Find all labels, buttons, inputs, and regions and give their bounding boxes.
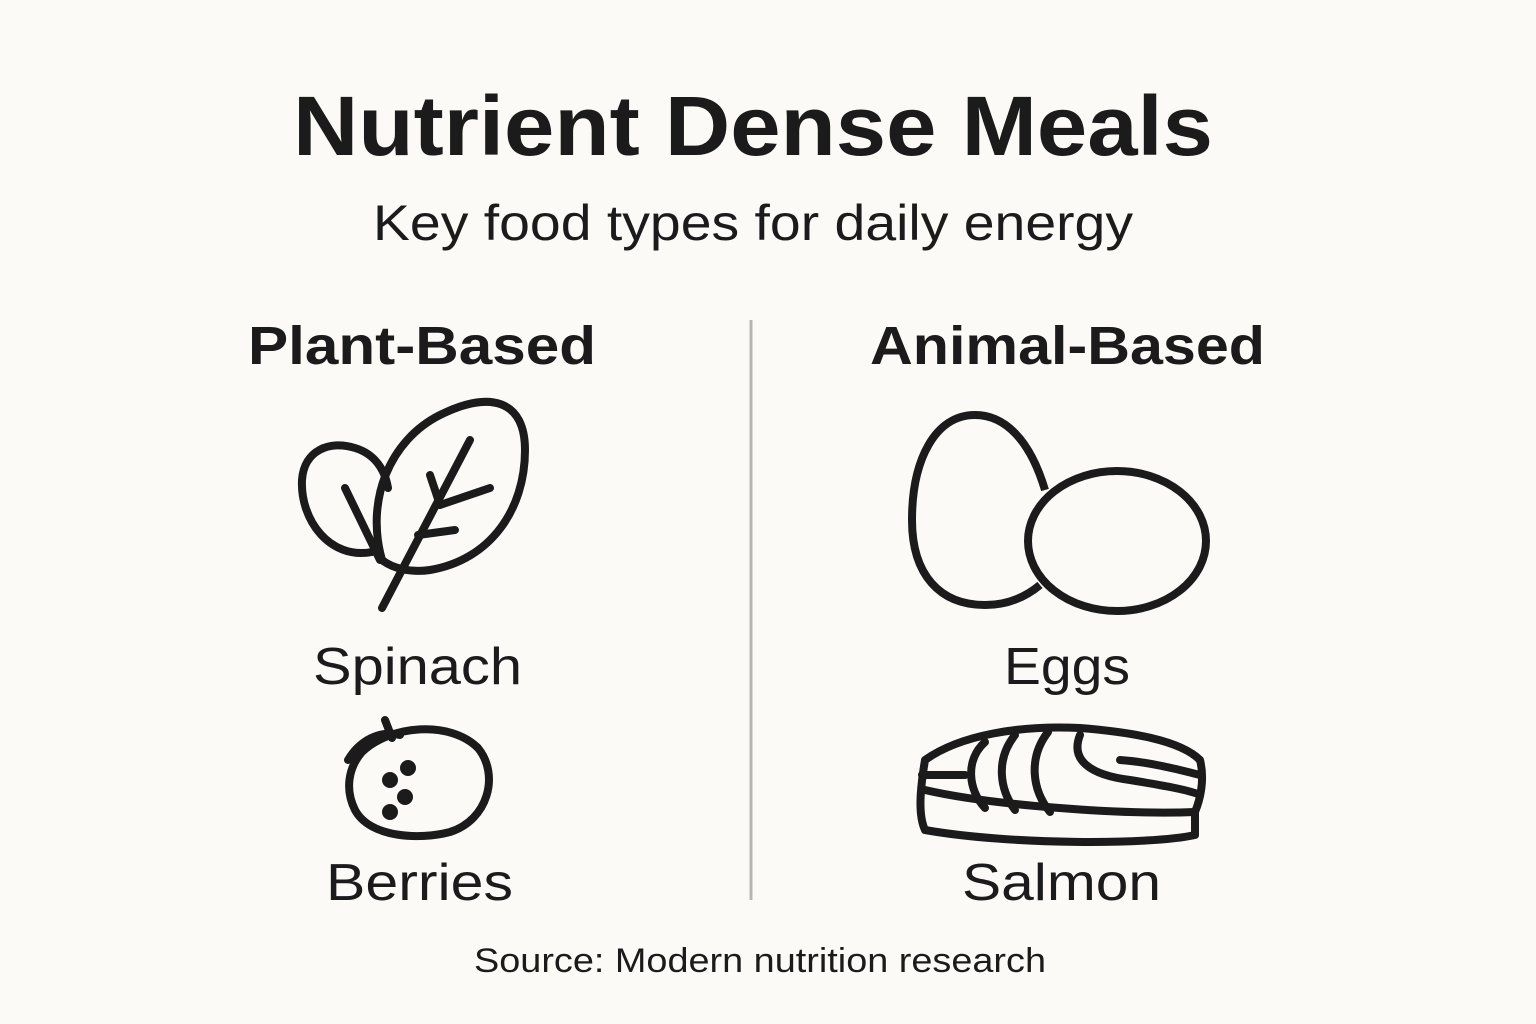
heading: plant-based: Plant-Based (248, 316, 596, 376)
subtitle: Key food types for daily energy (373, 195, 1133, 251)
heading: animal-based: Animal-Based (870, 316, 1265, 376)
icon: eggs (912, 415, 1206, 611)
icon: salmon (920, 727, 1202, 842)
source: Source: Modern nutrition research (474, 942, 1046, 980)
label: salmon: Salmon (962, 854, 1161, 912)
label: spinach: Spinach (313, 638, 522, 696)
label: eggs: Eggs (1004, 638, 1130, 696)
icon: berries (348, 720, 489, 836)
label: berries: Berries (326, 854, 513, 912)
icon: spinach (302, 402, 525, 608)
title: Nutrient Dense Meals (293, 79, 1213, 173)
